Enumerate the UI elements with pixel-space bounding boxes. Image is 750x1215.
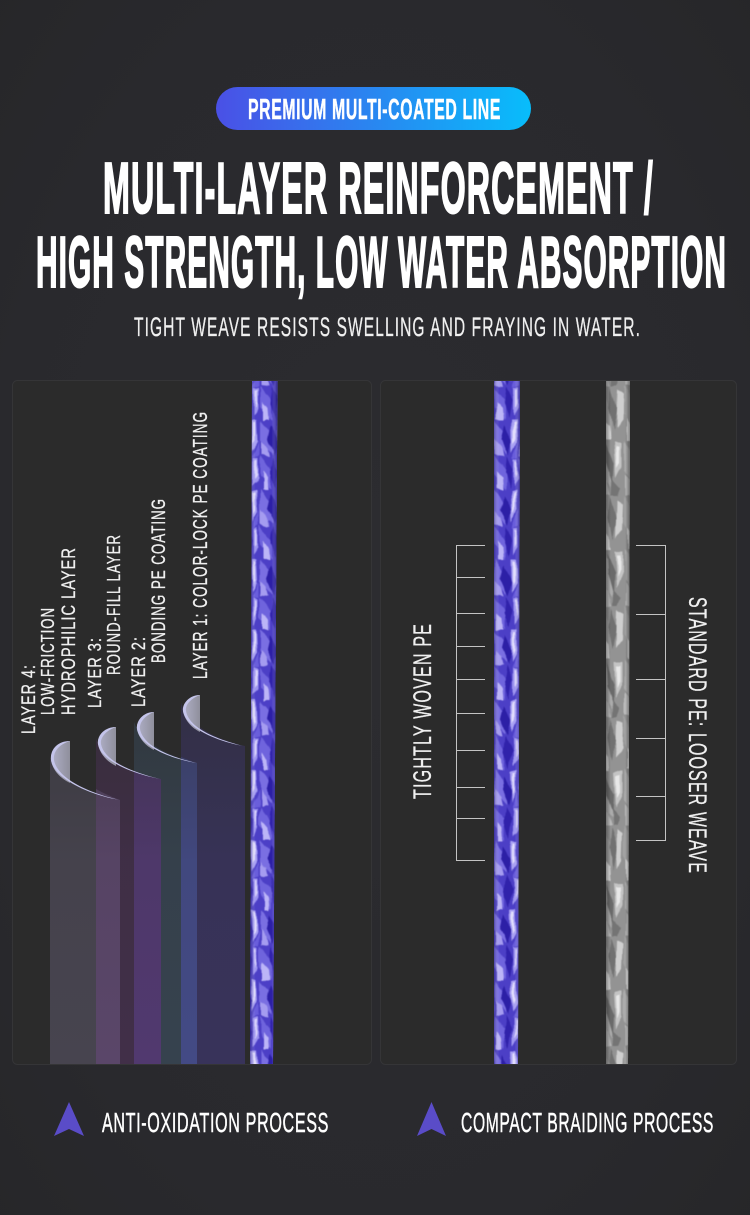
feature: compact braiding [417, 1102, 714, 1138]
title [36, 149, 727, 303]
tightly woven purple line [494, 381, 520, 1064]
layer 4 cup [51, 741, 70, 783]
icon: arrowhead [417, 1102, 446, 1136]
layer 1 body [181, 703, 245, 1064]
layer 1 cup [183, 695, 200, 732]
label: tightly woven: TIGHTLY WOVEN PE [409, 623, 437, 799]
purple braided line [250, 381, 278, 1064]
layer 3 body [96, 738, 160, 1064]
layer 3 label [85, 534, 124, 708]
layer 3 cup [98, 727, 116, 766]
layer 1 label: LAYER 1: COLOR-LOCK PE COATING [190, 411, 212, 679]
layer 1 and 2 overlap [181, 757, 197, 1064]
layer 4 rim [51, 741, 120, 800]
layer 4 label: LAYER 4: [19, 664, 40, 734]
badge: premium multi-coated line: PREMIUM MULTI-COATED LINE [248, 94, 501, 126]
layer 3 and 4 overlap [96, 789, 120, 1064]
panel: coating layers [12, 340, 372, 1100]
layer 2 rim [137, 712, 197, 763]
layer 4 body [50, 757, 120, 1064]
standard gray line [606, 381, 630, 1064]
layer 2 and 3 overlap [134, 771, 161, 1064]
loose weave ruler [636, 546, 666, 840]
layer 2 body [134, 722, 197, 1064]
layer 1 rim [183, 695, 243, 746]
layer 2 label [129, 498, 170, 707]
layer stack illustration [50, 695, 245, 1064]
panel: weave comparison [380, 340, 736, 1100]
layer 2 label: LAYER 2: [129, 636, 150, 707]
icon: arrowhead [54, 1102, 84, 1136]
badge: premium multi-coated line [216, 87, 531, 130]
layer 2 cup [137, 712, 154, 750]
feature: anti-oxidation [54, 1102, 329, 1138]
tight weave ruler [456, 546, 485, 860]
layer 2 label: BONDING PE COATING [149, 498, 170, 663]
layer 4 label: LOW-FRICTION [38, 607, 58, 715]
layer 4 label: HYDROPHILIC LAYER [59, 547, 80, 715]
label: standard PE: STANDARD PE: LOOSER WEAVE [683, 597, 711, 874]
layer 3 label: ROUND-FILL LAYER [104, 534, 124, 675]
feature: anti-oxidation: ANTI-OXIDATION PROCESS [102, 1107, 329, 1138]
layer 3 rim [98, 727, 160, 779]
layer 4 label [19, 547, 80, 734]
layer 3 label: LAYER 3: [85, 637, 105, 708]
stack shading [50, 703, 245, 1064]
